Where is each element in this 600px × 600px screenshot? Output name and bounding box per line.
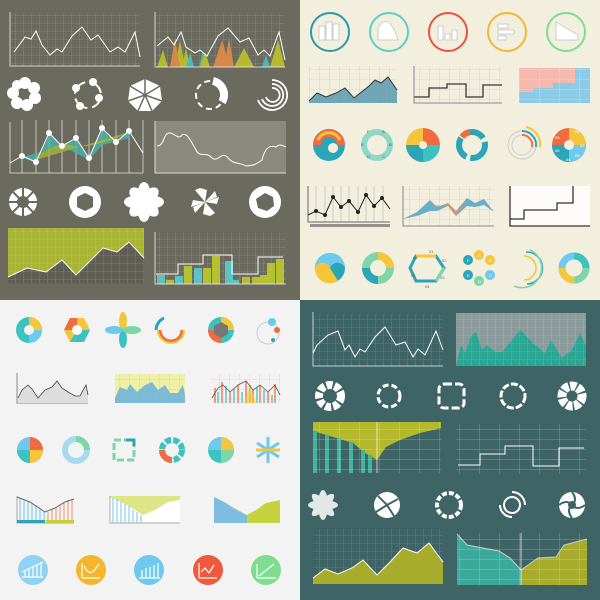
icon: arrows cycle xyxy=(73,79,102,109)
icon: letter circles: C xyxy=(489,273,492,278)
panel: bottom-left light xyxy=(0,300,300,600)
icon: letters ring: A xyxy=(382,129,385,134)
chart: pink blue xyxy=(519,68,590,103)
icon: numbered petals: 04 xyxy=(566,157,571,162)
chart: blue area xyxy=(309,66,397,103)
icon: hexagon numbered: 03 xyxy=(440,275,445,280)
icon: letters ring: B xyxy=(389,142,392,147)
chart: blue orange bars xyxy=(17,496,74,523)
icon: lettered donut xyxy=(366,256,390,280)
icon: hexagon numbered: 05 xyxy=(411,273,416,278)
icon: swirl xyxy=(406,128,440,162)
icon: numbered petals: 05 xyxy=(555,148,560,153)
icon: hexagon numbered: 02 xyxy=(442,258,447,263)
chart: green area xyxy=(8,228,144,283)
icon: daisy xyxy=(124,182,164,222)
icon: numbered petals: 03 xyxy=(575,153,580,158)
icon: donut colored xyxy=(562,256,586,280)
chart: black dots line xyxy=(308,186,390,227)
chart: teal line chart xyxy=(313,312,443,366)
icon: swirl ball xyxy=(315,253,345,283)
icon: hexagon numbered xyxy=(410,249,447,289)
icon: letters ring: F xyxy=(367,129,370,134)
icon: hexagon numbered: 06 xyxy=(413,255,418,260)
icon: heptagon xyxy=(128,79,162,111)
chart: step line xyxy=(456,424,586,474)
panel: bottom-right teal xyxy=(300,300,600,600)
chart: step box xyxy=(509,186,590,226)
icon: flower of circles xyxy=(7,77,41,111)
icon: letter circles: D xyxy=(478,279,481,284)
icon: concentric arcs xyxy=(258,80,287,110)
panel: top-left dark xyxy=(0,0,300,300)
chart: line chart 1 xyxy=(10,12,140,66)
chart: teal filled mountains xyxy=(456,313,586,366)
icon: numbered petals: 02 xyxy=(580,143,585,148)
icon: numbered petals: 06 xyxy=(555,135,560,140)
chart: step line xyxy=(414,66,502,103)
icon: hexagon numbered: 01 xyxy=(429,249,434,254)
chart: colored spikes xyxy=(210,374,280,403)
icon: donut segments xyxy=(459,132,485,158)
icon: letter circles: B xyxy=(489,258,492,263)
icon: teal icons row 2 xyxy=(308,490,585,520)
icon: hexagon numbered: 04 xyxy=(425,284,430,289)
chart: green area with bars xyxy=(313,422,441,473)
icon row: round chart badges xyxy=(18,555,281,585)
icon: arcs partial xyxy=(514,250,542,288)
icon: arcs xyxy=(508,127,540,159)
icon: letter circles xyxy=(463,250,495,286)
icon: letter circles: F xyxy=(467,258,470,263)
icon: swirl petals 1 xyxy=(9,188,37,216)
icon: numbered petals: 01 xyxy=(575,129,580,134)
chart: yellow blue area xyxy=(110,496,180,523)
chart: gray mountains xyxy=(17,373,88,403)
icon row: colorful rings xyxy=(16,312,280,348)
icon: numbered petals xyxy=(552,128,586,162)
icon: letters ring: C xyxy=(382,154,385,159)
chart: bars xyxy=(155,232,286,284)
chart: green mountains xyxy=(313,529,443,584)
icon: letters ring: E xyxy=(361,142,364,147)
chart: line with dots and fill xyxy=(10,120,143,173)
icon: segmented arc xyxy=(196,81,224,109)
chart: blue green area xyxy=(214,497,280,523)
chart: yellow blue mountains xyxy=(115,374,185,403)
icon: letter circles: A xyxy=(478,253,481,258)
chart: teal and green area xyxy=(457,533,587,585)
icon: letters ring: D xyxy=(367,154,370,159)
icon: spiral arc xyxy=(313,129,345,161)
icon: ring of petals xyxy=(249,186,281,218)
panel: top-right cream xyxy=(300,0,600,300)
icon: teal icons row 1 xyxy=(319,384,582,408)
icon: circle badges row xyxy=(311,13,585,51)
icon row: colorful rings 2 xyxy=(17,437,280,463)
icon: letter circles: E xyxy=(467,273,470,278)
chart: blue orange xyxy=(403,186,494,226)
chart: spike chart xyxy=(155,12,285,67)
icon: aperture xyxy=(69,186,101,218)
icon: pinwheel xyxy=(191,188,219,216)
chart: wavy line xyxy=(155,121,286,173)
icon: letters ring xyxy=(361,129,392,159)
